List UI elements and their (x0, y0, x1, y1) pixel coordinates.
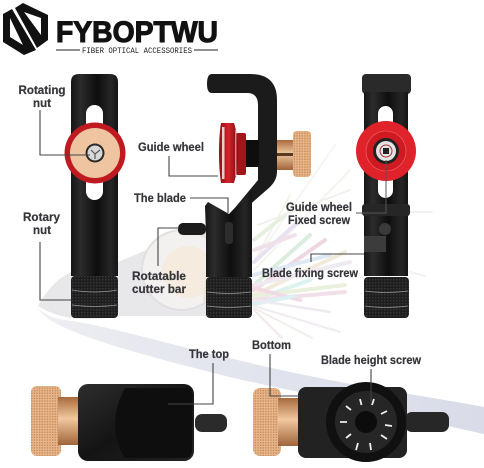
logo: tagline: FIBER OPTICAL ACCESSORIES (82, 46, 192, 56)
label: guide wheel (138, 142, 218, 176)
label: guide wheel: Guide wheel (138, 142, 204, 154)
label: rotary nut (23, 212, 71, 300)
label: rotatable cutter bar (132, 228, 187, 296)
tool: left view (64, 74, 126, 318)
label: blade height screw: Blade height screw (321, 355, 421, 367)
label: rotary nut: nut (33, 225, 51, 237)
label: guide wheel fixed screw: Guide wheel (286, 202, 352, 214)
label: the top: The top (189, 349, 229, 361)
label: the top (168, 349, 229, 404)
label: the blade (134, 193, 228, 213)
label: rotating nut: nut (33, 98, 51, 110)
label: rotary nut: Rotary (23, 212, 61, 224)
logo: hexagon mark (3, 3, 48, 55)
background: fiber cable (37, 230, 484, 434)
label: guide wheel fixed screw: Fixed screw (288, 215, 350, 227)
background: fanned coloured fibers (206, 145, 432, 338)
label: blade fixing screw: Blade fixing screw (262, 268, 358, 280)
label: blade height screw (321, 355, 421, 402)
tool: middle view (178, 74, 311, 318)
label: rotating nut: Rotating (18, 85, 66, 97)
label: the blade: The blade (134, 193, 186, 205)
label: rotatable cutter bar: cutter bar (132, 284, 187, 296)
label: rotating nut (18, 85, 90, 155)
logo: brand name: FYBOPTWU (56, 16, 218, 49)
label: rotatable cutter bar: Rotatable (132, 271, 186, 283)
label: bottom (252, 340, 300, 396)
label: blade fixing screw (262, 254, 364, 280)
label: guide wheel fixed screw (286, 160, 386, 227)
tool: bottom side view (253, 382, 449, 462)
tool: top side view (31, 384, 227, 461)
label: bottom: Bottom (252, 340, 291, 352)
tool: right view (356, 74, 416, 318)
